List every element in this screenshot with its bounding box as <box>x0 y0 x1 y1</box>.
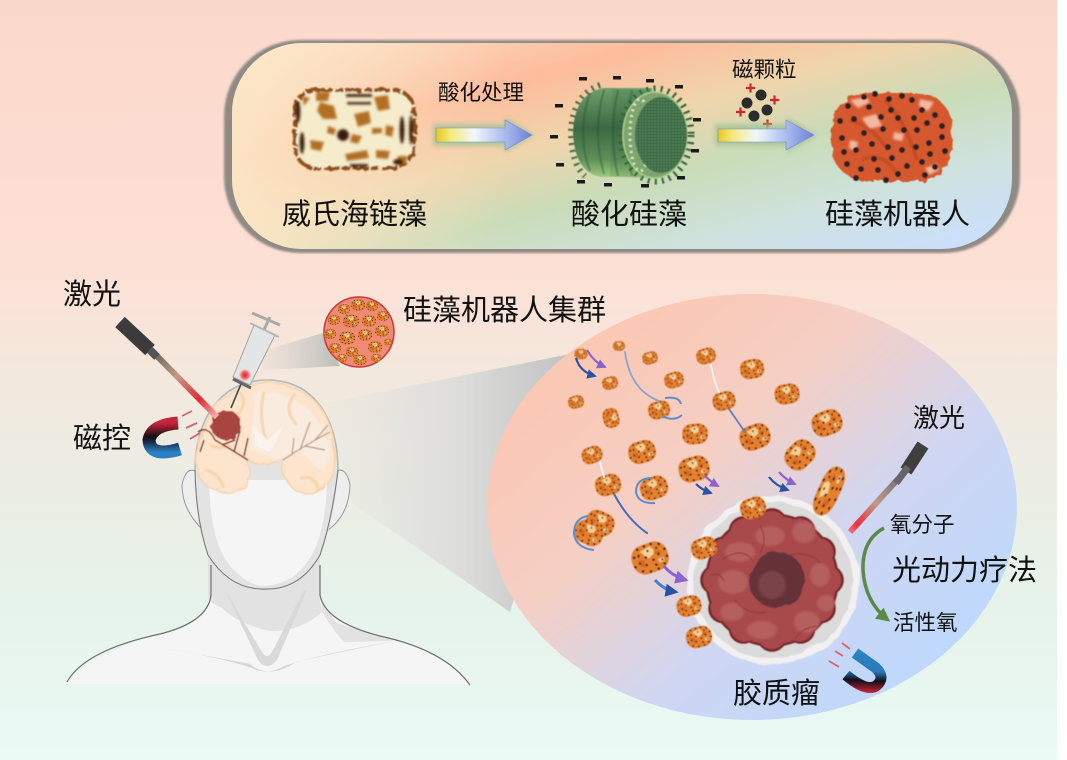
pill left tint <box>232 43 1012 249</box>
panel: magnified tumor view <box>487 294 1037 720</box>
label: laser: 激光 <box>913 403 965 433</box>
brain vessels right <box>283 422 330 460</box>
label: diatom robot: 硅藻机器人 <box>825 198 970 231</box>
neck shoulders <box>67 555 470 684</box>
icon: magnet tumor <box>829 643 881 688</box>
head shape <box>195 380 338 589</box>
arrow: magnetic coating <box>715 117 817 153</box>
brain <box>196 383 335 494</box>
needle <box>231 384 241 408</box>
pill body <box>232 43 1012 249</box>
acidified diatom <box>571 85 691 181</box>
arrow: acid treatment <box>433 117 534 153</box>
icon: magnet head <box>149 411 200 452</box>
barrel <box>233 325 275 385</box>
tumor core <box>749 552 805 608</box>
neck side shade <box>322 600 400 642</box>
label: magnetic control: 磁控 <box>73 422 131 455</box>
neck V <box>225 590 307 666</box>
arrow: oxygen to ROS <box>863 528 888 620</box>
zoom cone: brain to tumor <box>325 350 590 612</box>
rotation rings <box>574 398 682 550</box>
raw diatom <box>295 90 414 168</box>
label: acid treatment: 酸化处理 <box>438 81 524 105</box>
patient head <box>67 380 470 685</box>
ears <box>182 470 350 530</box>
right cortex wash <box>250 392 330 470</box>
label: photodynamic therapy: 光动力疗法 <box>892 554 1037 587</box>
negative charges <box>550 76 701 188</box>
laser probe: head <box>120 322 217 417</box>
label: magnetic particles: 磁颗粒 <box>732 58 797 82</box>
sulci <box>205 392 318 490</box>
magnified circle <box>487 294 1017 720</box>
neck shade <box>208 555 322 631</box>
collarbones <box>160 640 400 672</box>
jaw line <box>195 470 338 589</box>
face <box>209 480 327 586</box>
plunger <box>252 313 280 336</box>
magnetic particles <box>736 84 779 128</box>
label: laser head: 激光 <box>63 278 121 311</box>
robot cluster circle <box>324 297 394 367</box>
label: glioma: 胶质瘤 <box>733 677 820 710</box>
diatom swarm <box>567 341 850 650</box>
diatom robot <box>832 91 952 183</box>
pill frame <box>224 40 1020 253</box>
label: acidified diatom: 酸化硅藻 <box>571 198 687 231</box>
label: Weissflogii diatom: 威氏海链藻 <box>282 198 427 231</box>
outline shoulders <box>67 565 470 685</box>
brain tumor <box>211 410 241 440</box>
motion trails <box>600 352 745 533</box>
midline pale shape <box>252 425 284 452</box>
label: oxygen: 氧分子 <box>890 513 955 537</box>
zoom cone: syringe to cluster <box>262 333 340 370</box>
panel: diatom robot preparation <box>224 40 1020 253</box>
label: reactive oxygen: 活性氧 <box>893 611 958 635</box>
laser probe: tumor <box>850 445 923 532</box>
skull line <box>195 380 338 470</box>
brain vessels left <box>198 430 248 460</box>
syringe <box>231 313 280 408</box>
tumor <box>687 497 859 665</box>
motion arrows <box>576 350 795 592</box>
label: robot cluster: 硅藻机器人集群 <box>403 294 606 327</box>
